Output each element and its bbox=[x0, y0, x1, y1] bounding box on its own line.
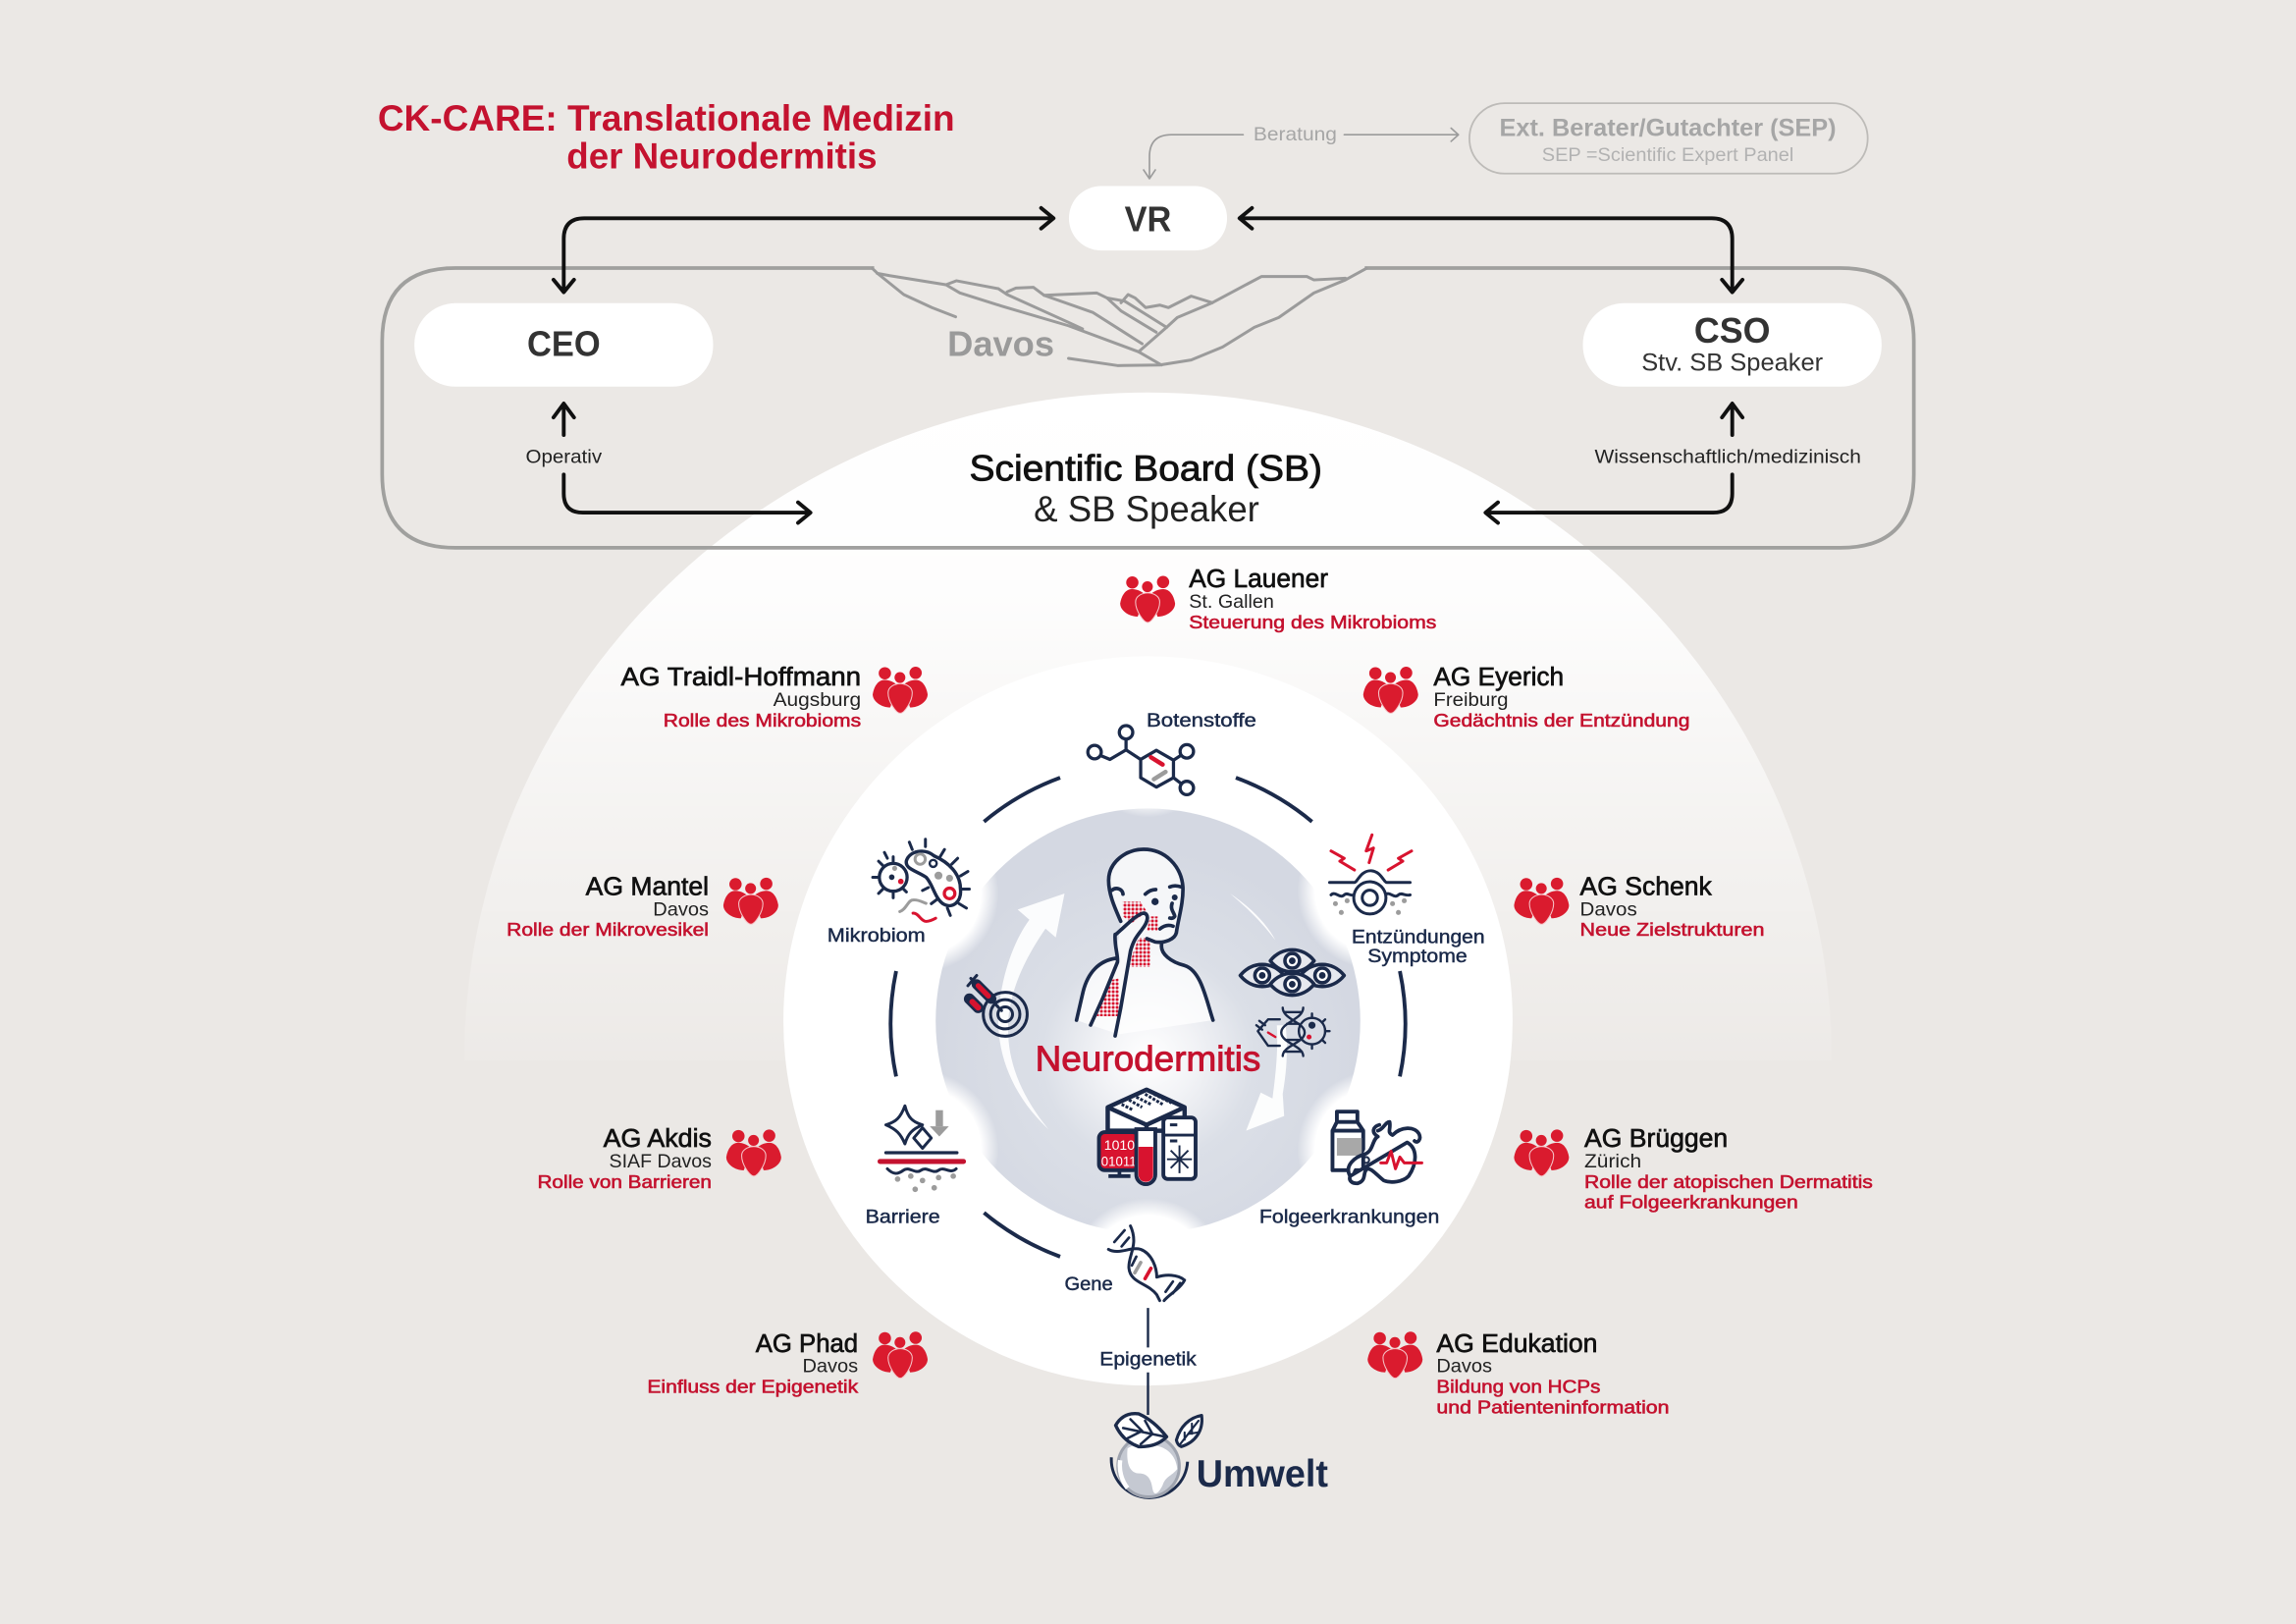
label: Umwelt: Umwelt bbox=[1197, 1453, 1328, 1495]
title: der Neurodermitis bbox=[566, 135, 878, 177]
working group: AG Traidl-Hoffmann: Augsburg bbox=[774, 689, 861, 711]
icon: patient with eczema bbox=[1077, 849, 1213, 1036]
working group: AG Phad: Davos bbox=[802, 1356, 858, 1378]
working group: AG Schenk: Neue Zielstrukturen bbox=[1580, 919, 1765, 940]
working group: AG Edukation: Bildung von HCPs bbox=[1436, 1377, 1600, 1397]
node halos bbox=[840, 677, 1456, 1356]
external advisor box: SEP =Scientific Expert Panel bbox=[1542, 144, 1793, 166]
working group: AG Phad: AG Phad bbox=[756, 1328, 858, 1358]
title bbox=[378, 97, 955, 177]
arrow: scientific link bbox=[1485, 404, 1861, 523]
icon: data, biobank and freezer: 1010 bbox=[1104, 1138, 1135, 1154]
working group: AG Lauener: AG Lauener bbox=[1189, 564, 1328, 593]
heading: Scientific Board: Scientific Board (SB) bbox=[970, 447, 1322, 488]
node: Botenstoffe: Botenstoffe bbox=[1147, 710, 1256, 731]
working group: AG Eyerich: AG Eyerich bbox=[1433, 662, 1564, 691]
box: VR: VR bbox=[1125, 200, 1172, 240]
working group: AG Mantel: Rolle der Mikrovesikel bbox=[507, 919, 709, 940]
working group: AG Phad bbox=[647, 1328, 928, 1397]
node: Gene bbox=[1064, 1226, 1185, 1301]
working group: AG Schenk bbox=[1514, 871, 1765, 940]
mountain illustration: Davos: Davos bbox=[947, 324, 1054, 363]
icon: eyes bbox=[1240, 949, 1344, 996]
working group: AG Mantel bbox=[507, 871, 778, 940]
working group: AG Edukation: AG Edukation bbox=[1436, 1328, 1597, 1358]
node: Entzündungen Symptome bbox=[1329, 835, 1485, 967]
working group: AG Eyerich: Freiburg bbox=[1433, 689, 1508, 711]
working group: AG Akdis: AG Akdis bbox=[604, 1123, 712, 1153]
inner white disc bbox=[783, 656, 1513, 1385]
advisory arrows: Beratung bbox=[1254, 124, 1337, 145]
icon: data, biobank and freezer: 01011 bbox=[1101, 1154, 1137, 1169]
node: Mikrobiom bbox=[828, 839, 970, 947]
heading: Scientific Board: & SB Speaker bbox=[1034, 488, 1259, 529]
node: Folgeerkrankungen bbox=[1259, 1111, 1439, 1228]
working group: AG Akdis: SIAF Davos bbox=[610, 1151, 712, 1172]
heading: Neurodermitis: Neurodermitis bbox=[1036, 1039, 1260, 1078]
white arch backdrop bbox=[464, 393, 1832, 1060]
working group: AG Brüggen: auf Folgeerkrankungen bbox=[1584, 1192, 1798, 1213]
white circular arrow: left bbox=[998, 893, 1064, 1129]
working group: AG Akdis: Rolle von Barrieren bbox=[537, 1171, 712, 1192]
icon: data, biobank and freezer bbox=[1099, 1090, 1196, 1184]
external advisor box: Ext. Berater/Gutachter (SEP) bbox=[1500, 115, 1837, 142]
box: CSO: CSO bbox=[1694, 311, 1770, 351]
working group: AG Traidl-Hoffmann: AG Traidl-Hoffmann bbox=[620, 662, 861, 691]
arrow: operative link: Operativ bbox=[526, 446, 602, 467]
connector with label: Epigenetik: Epigenetik bbox=[1099, 1348, 1197, 1370]
box: CEO: CEO bbox=[527, 324, 601, 363]
working group: AG Lauener: St. Gallen bbox=[1189, 591, 1274, 613]
node: Gene: Gene bbox=[1064, 1273, 1113, 1295]
box: CSO: Stv. SB Speaker bbox=[1641, 349, 1824, 376]
working group: AG Mantel: Davos bbox=[653, 898, 709, 920]
working group: AG Brüggen: Rolle der atopischen Dermatitis bbox=[1584, 1171, 1873, 1192]
advisory arrows bbox=[1144, 124, 1459, 179]
node: Folgeerkrankungen: Folgeerkrankungen bbox=[1259, 1207, 1439, 1228]
white circular arrow: right bbox=[1230, 893, 1287, 1131]
node: Botenstoffe bbox=[1088, 710, 1256, 794]
icon: target and syringe bbox=[968, 975, 1027, 1036]
node: Entzündungen Symptome: Symptome bbox=[1367, 946, 1468, 967]
node: Entzündungen Symptome: Entzündungen bbox=[1352, 927, 1485, 948]
node: Mikrobiom: Mikrobiom bbox=[828, 925, 926, 947]
working group: AG Lauener: Steuerung des Mikrobioms bbox=[1189, 612, 1436, 632]
working group: AG Mantel: AG Mantel bbox=[586, 871, 709, 900]
external advisor box bbox=[1469, 103, 1868, 174]
central grey disc bbox=[935, 808, 1361, 1233]
arrow: VR to CSO bbox=[1240, 208, 1742, 293]
working group: AG Lauener bbox=[1120, 564, 1436, 632]
box: VR bbox=[1069, 186, 1227, 250]
working group: AG Brüggen: Zürich bbox=[1584, 1151, 1641, 1172]
cycle arcs bbox=[890, 778, 1406, 1257]
working group: AG Eyerich: Gedächtnis der Entzündung bbox=[1433, 710, 1689, 731]
working group: AG Phad: Einfluss der Epigenetik bbox=[647, 1377, 859, 1397]
heading: Scientific Board bbox=[970, 447, 1322, 529]
working group: AG Edukation bbox=[1367, 1328, 1670, 1417]
arrow: scientific link: Wissenschaftlich/medizinisch bbox=[1594, 446, 1861, 467]
icon: globe with leaves bbox=[1111, 1414, 1201, 1497]
mountain illustration: Davos bbox=[873, 268, 1366, 365]
box: CSO bbox=[1583, 303, 1882, 387]
working group: AG Traidl-Hoffmann bbox=[620, 662, 928, 731]
node: Barriere: Barriere bbox=[866, 1207, 940, 1228]
working group: AG Schenk: AG Schenk bbox=[1580, 871, 1713, 900]
box: CEO bbox=[414, 303, 713, 387]
node: Barriere bbox=[866, 1106, 964, 1228]
working group: AG Traidl-Hoffmann: Rolle des Mikrobioms bbox=[664, 710, 861, 731]
working group: AG Eyerich bbox=[1363, 662, 1689, 731]
working group: AG Edukation: Davos bbox=[1436, 1356, 1492, 1378]
working group: AG Schenk: Davos bbox=[1580, 898, 1637, 920]
arrow: VR to CEO bbox=[554, 208, 1053, 293]
working group: AG Brüggen: AG Brüggen bbox=[1584, 1123, 1728, 1153]
connector with label: Epigenetik bbox=[1099, 1308, 1197, 1415]
icon: DNA with cells bbox=[1256, 1007, 1329, 1056]
title: CK-CARE: Translationale Medizin bbox=[378, 97, 955, 138]
working group: AG Brüggen bbox=[1514, 1123, 1873, 1213]
arrow: operative link bbox=[526, 404, 811, 523]
main governance frame bbox=[382, 268, 1914, 548]
working group: AG Akdis bbox=[537, 1123, 781, 1192]
working group: AG Edukation: und Patienteninformation bbox=[1436, 1396, 1670, 1417]
